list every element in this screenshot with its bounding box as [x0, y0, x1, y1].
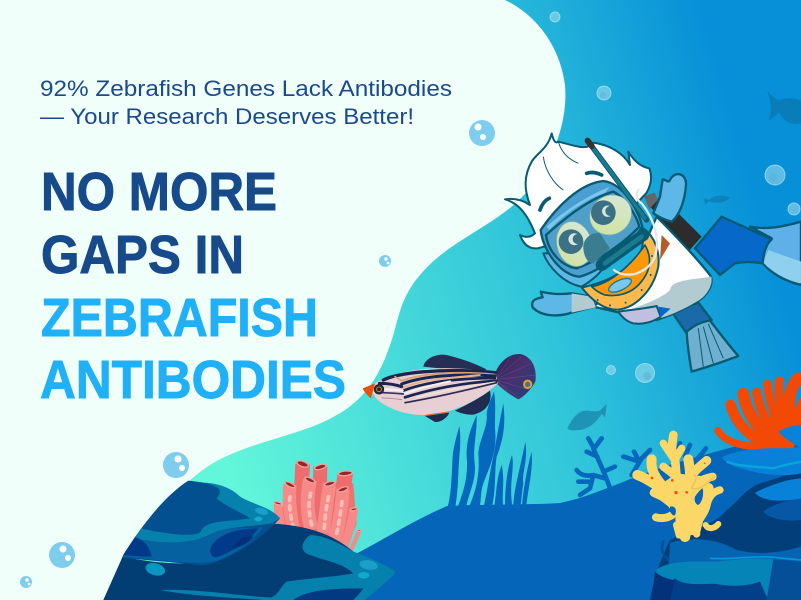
upper rock band	[110, 527, 263, 563]
left rocks	[97, 481, 396, 600]
right pupil glint	[602, 206, 611, 217]
right front slab	[767, 559, 801, 600]
tube back row	[301, 464, 345, 530]
tube openings	[274, 459, 361, 531]
headline: ZEBRAFISH	[41, 288, 318, 348]
headline	[40, 162, 346, 410]
coral base	[277, 483, 357, 550]
left lens	[552, 218, 597, 270]
rock dark front	[652, 572, 675, 600]
lower rock stripe	[657, 578, 768, 600]
blue coral silhouettes	[577, 438, 706, 495]
subtitle text: — Your Research Deserves Better!	[40, 104, 414, 129]
coral spots	[651, 462, 705, 494]
bubble	[163, 452, 189, 478]
bubble	[469, 120, 495, 146]
tube front row	[278, 480, 359, 552]
fish silhouette small	[704, 196, 730, 205]
upper rock spots	[146, 563, 165, 576]
tail rays	[497, 356, 535, 397]
white tube	[614, 190, 657, 275]
lower rock shadow	[293, 588, 363, 600]
upper leg and fin	[695, 217, 801, 285]
upper rock shadows	[210, 528, 258, 557]
solid bubbles	[20, 120, 495, 588]
bib outer	[582, 228, 659, 310]
right arm	[653, 174, 686, 222]
shorts	[618, 306, 661, 324]
upper rock	[110, 481, 280, 565]
bib inner	[592, 245, 649, 296]
nose piece	[583, 233, 610, 263]
lower leg and fin	[672, 303, 738, 372]
lower rock highlight band	[656, 558, 773, 600]
lower fin ribs	[698, 324, 723, 367]
tube coral	[274, 459, 361, 552]
lower rock spots	[360, 560, 378, 570]
tail fin	[495, 354, 536, 399]
tube highlights	[290, 493, 342, 537]
upper ledge stripe	[727, 462, 801, 468]
upper rock highlight top	[132, 483, 280, 542]
striped fish	[363, 354, 536, 422]
tank top	[644, 193, 658, 209]
brown strap	[660, 235, 670, 260]
snorkel tube	[588, 142, 647, 220]
yellow coral shade	[692, 475, 715, 489]
white curved panel	[0, 0, 565, 600]
air tank strap	[647, 195, 702, 252]
small coral behind	[662, 542, 668, 560]
yellow coral hole	[695, 488, 703, 505]
bubble	[379, 255, 391, 267]
hair strands	[543, 142, 578, 190]
diver character	[505, 133, 801, 372]
top ledge	[778, 425, 801, 448]
lower fins	[425, 391, 491, 422]
upper ledge	[722, 447, 801, 475]
left pupil glint	[568, 233, 578, 245]
hair	[505, 133, 651, 253]
subtitle text: 92% Zebrafish Genes Lack Antibodies	[40, 76, 452, 101]
dark rock mass	[650, 470, 801, 600]
yellow coral	[637, 435, 720, 537]
mouthpiece	[602, 235, 643, 265]
left arm	[532, 292, 595, 315]
dorsal fin	[423, 355, 487, 373]
lower rock	[97, 523, 396, 600]
lower face	[543, 253, 603, 287]
eyebrows	[540, 173, 602, 210]
left sleeve	[572, 293, 596, 313]
mouthpiece inner	[605, 237, 642, 263]
fish silhouette top right	[767, 91, 801, 124]
right reef	[637, 378, 801, 600]
sea grass	[447, 392, 532, 508]
shorts blue patch	[658, 307, 671, 317]
fish silhouette lower	[567, 404, 607, 430]
left pupil	[559, 229, 583, 254]
headline: NO MORE	[41, 162, 277, 222]
bib rivets	[597, 255, 653, 306]
right pupil	[591, 200, 616, 225]
seabed	[340, 430, 801, 600]
middle ledge	[755, 478, 801, 501]
yellow coral notch	[670, 506, 676, 516]
rock light line	[710, 557, 801, 560]
bib window	[607, 276, 633, 295]
lower rock highlight	[160, 535, 396, 600]
fish body	[370, 368, 498, 415]
headline: GAPS IN	[41, 225, 244, 285]
snorkel tip	[588, 141, 592, 146]
middle ledge lower	[763, 498, 801, 520]
fish snout	[363, 383, 375, 398]
snorkel inner	[593, 148, 646, 219]
red fan coral	[718, 378, 801, 447]
right lens	[583, 188, 639, 242]
bubble	[20, 576, 32, 588]
lower rock	[660, 539, 801, 600]
mask frame	[546, 192, 639, 268]
tail eyespot	[524, 381, 531, 388]
body	[593, 217, 711, 320]
yellow coral body	[660, 473, 708, 538]
translucent bubbles	[550, 12, 800, 382]
bubble	[49, 542, 75, 568]
body shading	[620, 277, 712, 319]
diving mask	[541, 181, 642, 277]
headline: ANTIBODIES	[40, 350, 346, 410]
subtitle text	[40, 76, 452, 129]
fish eye	[374, 385, 384, 394]
body stripes	[379, 371, 497, 415]
mask light strip	[547, 187, 610, 230]
